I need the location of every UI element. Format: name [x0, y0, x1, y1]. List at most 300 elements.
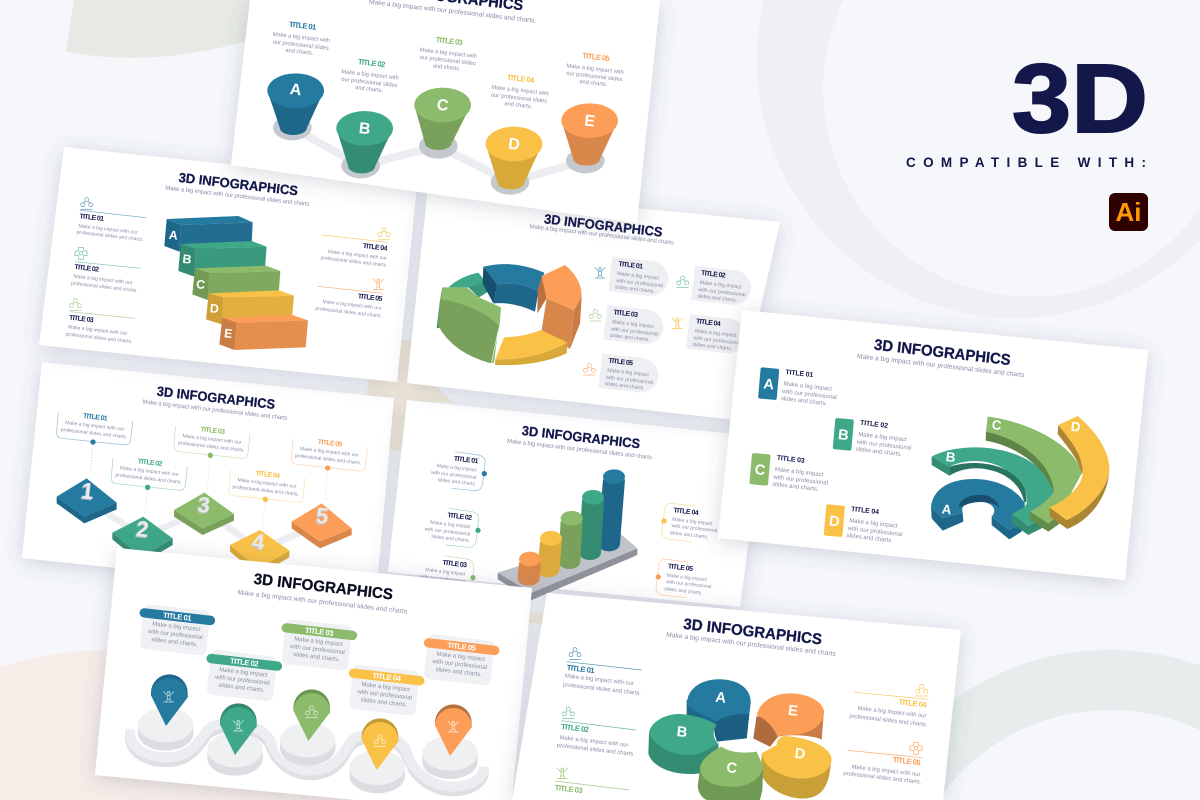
petal C [698, 747, 763, 800]
item 3: TITLE 03 [554, 783, 583, 795]
wavy base [130, 723, 484, 791]
card 4: TITLE 04 [372, 671, 402, 683]
item D: Make a big impact [849, 518, 898, 530]
item 3: our professional slides [419, 55, 476, 67]
cone E [561, 103, 618, 173]
item 5: TITLE 05 [357, 293, 383, 303]
subheading: Make a big impact with our professional slides and charts [142, 399, 288, 422]
item 5: slides and charts. [664, 586, 703, 597]
card 3 [603, 305, 665, 346]
pin 5 [435, 704, 472, 756]
item 2: Make a big impact with our [73, 274, 133, 286]
item 1: TITLE 01 [289, 20, 317, 32]
callout 3: TITLE 03 [200, 426, 225, 436]
item 5: Make a big impact with our [322, 299, 382, 312]
item 3: and charts. [432, 63, 461, 73]
card 1: with our professional [147, 629, 203, 641]
slide content [437, 211, 753, 394]
item 3: slides and charts. [426, 581, 465, 592]
pin 2 [220, 703, 257, 755]
item 4: Make a big impact [672, 517, 713, 527]
donut chart [437, 264, 582, 365]
segment: orange [537, 265, 582, 349]
callout 5: Make a big impact with our [300, 446, 359, 459]
card 5: TITLE 05 [608, 358, 633, 367]
card 3: slides and charts. [609, 333, 650, 343]
card 3 [281, 619, 358, 671]
connector path [292, 128, 585, 182]
platform 2 [112, 516, 173, 563]
item 3: Make a big impact [425, 567, 466, 578]
card 3: TITLE 03 [613, 309, 638, 319]
petal D [761, 736, 832, 799]
subheading: Make a big impact with our professional slides and charts [507, 439, 652, 461]
stair E [219, 315, 308, 350]
cone B: B [358, 120, 371, 138]
item A [758, 367, 837, 407]
card 2 [691, 266, 753, 307]
slide: cones [231, 0, 660, 223]
callout 1: TITLE 01 [83, 413, 108, 423]
platform 3 [174, 492, 234, 535]
slide panel [231, 0, 660, 223]
heading: 3D INFOGRAPHICS [253, 571, 394, 604]
arc C [986, 417, 1082, 532]
item 5: Make a big impact with [566, 63, 624, 76]
item D: with our professional [846, 526, 903, 538]
slide: arcs [718, 310, 1148, 580]
disc 3 [277, 723, 338, 766]
icon 3 [589, 309, 601, 321]
platform 4 [230, 529, 289, 575]
cone D: D [507, 136, 521, 154]
title: 3D: 3D [1012, 44, 1148, 153]
item 5 [315, 279, 384, 319]
heading: 3D INFOGRAPHICS [178, 170, 299, 198]
item A: TITLE 01 [785, 369, 814, 379]
pin 4 [362, 718, 398, 770]
callout 3: professional slides and charts [178, 440, 244, 454]
background: tan cross [366, 340, 550, 624]
pin 3 [293, 689, 330, 741]
callout 2: Make a big impact with our [120, 465, 179, 478]
bar A [598, 469, 625, 551]
stair D [206, 290, 294, 324]
item D: TITLE 04 [851, 506, 879, 516]
bar B [579, 490, 604, 560]
card 2: Make a big impact [700, 280, 742, 291]
callout 4: TITLE 04 [255, 470, 280, 480]
platform 5: 5 [315, 503, 330, 529]
heading: 3D INFOGRAPHICS [156, 384, 276, 412]
card 2: Make a big impact [219, 667, 268, 679]
background: top-left green shape [66, 0, 256, 58]
item 2: Make a big impact with our [559, 735, 629, 749]
item 1: professional slides and charts. [76, 230, 144, 243]
petal C: C [725, 760, 738, 777]
callout 2: professional slides and charts [115, 472, 181, 486]
card 3: Make a big impact [294, 637, 343, 648]
card 5: TITLE 05 [447, 641, 477, 653]
item 3: professional slides and charts. [65, 332, 133, 345]
item 2: TITLE 02 [447, 512, 472, 522]
card 4 [348, 664, 425, 716]
item 4: TITLE 04 [898, 697, 928, 710]
icon 2 [677, 276, 689, 288]
item 4 [849, 684, 929, 728]
card 4 [686, 314, 748, 355]
card 1: TITLE 01 [163, 611, 193, 623]
subheading: Make a big impact with our professional slides and charts [237, 589, 408, 616]
slide panel [39, 147, 417, 382]
item 4: Make a big impact with our [857, 706, 927, 720]
callout 4: Make a big impact with our [237, 477, 297, 490]
bar D [537, 531, 562, 577]
slide panel [95, 548, 532, 800]
heading: 3D INFOGRAPHICS [873, 337, 1012, 369]
cone C: C [436, 97, 450, 115]
stair C: C [195, 277, 206, 292]
item 3 [65, 299, 135, 345]
stair D: D [209, 301, 220, 316]
callout 3 [174, 426, 250, 490]
item 1 [272, 20, 330, 57]
slide: map pins [95, 548, 532, 800]
heading: 3D INFOGRAPHICS [682, 616, 823, 648]
callout 4: professional slides and charts. [232, 484, 299, 498]
disc 5 [419, 736, 481, 779]
card 4: Make a big impact [361, 682, 410, 693]
item 2 [71, 247, 141, 294]
background: bottom-right green ring [868, 650, 1200, 800]
item 4: Make a big impact with our [328, 249, 387, 262]
slide panel [718, 310, 1148, 580]
card 5: Make a big impact [607, 368, 650, 378]
item 3 [419, 35, 477, 73]
card 3: with our professional [289, 644, 345, 656]
slide: cylinder bars [388, 400, 762, 607]
item 5: TITLE 05 [582, 51, 611, 63]
item A: with our professional [781, 389, 837, 401]
card 2: slides and charts. [218, 683, 265, 694]
item 5: TITLE 05 [667, 563, 693, 573]
platform 1: 1 [80, 478, 95, 504]
item 1: TITLE 01 [566, 663, 596, 675]
item 4 [661, 503, 717, 542]
subheading: Make a big impact with our professional slides and charts [857, 353, 1025, 379]
item B: B [837, 427, 850, 444]
slide content [419, 423, 717, 600]
item 2: Make a big impact [430, 520, 471, 530]
card 4: slides and charts. [692, 342, 733, 352]
item 1: Make a big impact with our [78, 223, 138, 236]
icon: Adobe Illustrator: Ai [1116, 197, 1142, 227]
item 5 [843, 742, 923, 786]
item 2 [556, 707, 636, 758]
callout 1: professional slides and charts [60, 427, 127, 440]
slide panel [22, 362, 394, 595]
item 4: professional slides and charts. [849, 714, 928, 728]
stair C [192, 266, 280, 300]
item 2: professional slides and charts. [556, 743, 635, 758]
card 3: slides and charts. [293, 652, 340, 663]
item 4: Make a big impact with [491, 85, 549, 97]
slide panel [512, 593, 961, 800]
item 5: with our professional [666, 579, 712, 590]
subheading: Make a big impact with our professional slides and charts [529, 224, 674, 247]
item 2: TITLE 02 [358, 57, 386, 69]
item 5: TITLE 05 [892, 755, 922, 767]
bar E [518, 552, 541, 586]
heading: 3D INFOGRAPHICS [543, 211, 663, 240]
item 1: TITLE 01 [453, 456, 479, 465]
slide content [65, 170, 390, 350]
card 5 [423, 634, 500, 686]
item 3 [419, 556, 476, 595]
item B: Make a big impact [858, 432, 907, 443]
item 4: our professional slides [491, 92, 547, 105]
base plate [498, 533, 637, 600]
item 2: professional slides and charts. [71, 281, 138, 294]
cone D [486, 127, 542, 195]
item 5: Make a big impact [666, 573, 708, 583]
item 5 [566, 51, 624, 88]
petal B: B [676, 724, 688, 741]
heading: 3D INFOGRAPHICS [521, 423, 641, 451]
item A: Make a big impact [783, 381, 832, 393]
callout 1: Make a big impact with our [65, 420, 125, 433]
item 5: Make a big impact with our [851, 764, 921, 778]
item 2: and charts. [355, 85, 384, 94]
arc D [1049, 416, 1109, 529]
slide content [749, 337, 1109, 544]
item 1: and charts. [285, 48, 314, 57]
item 2 [424, 508, 481, 547]
icon 5 [583, 363, 595, 375]
connector path [87, 500, 322, 550]
petal E: E [787, 703, 799, 720]
disc 1 [135, 708, 196, 751]
callout 2: TITLE 02 [137, 458, 163, 468]
item 1: Make a big impact with [272, 32, 330, 44]
item D: slides and charts. [846, 533, 893, 544]
subheading: Make a big impact with our professional slides and charts [666, 632, 837, 658]
item 1 [563, 648, 642, 697]
item D: D [828, 513, 841, 531]
platform 2: 2 [135, 516, 150, 542]
item C: with our professional [772, 475, 828, 487]
callout 5: professional slides and charts. [294, 453, 362, 466]
petal A: A [714, 690, 727, 707]
stair E: E [223, 326, 233, 341]
item 2: slides and charts. [431, 534, 470, 544]
slide: petals [512, 593, 961, 800]
segment: green [438, 287, 501, 363]
item 1 [431, 452, 487, 491]
item 3 [554, 768, 629, 795]
callout 4 [229, 470, 305, 529]
arc B [932, 447, 1054, 535]
icon: Adobe Illustrator [1109, 193, 1148, 231]
card 2 [206, 649, 283, 702]
card 1: TITLE 01 [618, 261, 643, 271]
card 1: Make a big impact [617, 271, 660, 282]
slide panel [407, 188, 780, 420]
item 3: Make a big impact with our [68, 324, 128, 337]
item 3: with our professional [419, 574, 465, 585]
item 2: Make a big impact with [341, 69, 399, 82]
item 5: our professional slides [566, 71, 623, 83]
segment: yellow [495, 330, 567, 365]
item 1: TITLE 01 [79, 213, 104, 223]
item 5 [656, 559, 712, 598]
item B: slides and charts. [855, 447, 902, 458]
item 1 [76, 198, 146, 243]
background: top-right ring [757, 0, 1200, 318]
slide content [130, 571, 500, 793]
platform 3: 3 [197, 492, 211, 518]
card 5: slides and charts. [435, 667, 482, 678]
card 5 [598, 353, 660, 394]
callout 1 [57, 413, 133, 470]
petal B [648, 714, 718, 774]
item 5: professional slides and charts. [315, 306, 382, 319]
stair A [164, 216, 253, 252]
platform 1 [57, 478, 117, 523]
card 1 [608, 257, 670, 298]
card 5: Make a big impact [436, 652, 485, 663]
item B: with our professional [855, 440, 912, 452]
cone A: A [289, 81, 303, 99]
disc 2 [204, 733, 266, 776]
disc 4 [347, 750, 408, 793]
item 1: our professional slides [272, 39, 329, 52]
item 4: with our professional [671, 523, 717, 534]
callout 3: Make a big impact with our [182, 433, 242, 446]
slide content [554, 616, 929, 800]
item 3: TITLE 03 [69, 315, 94, 324]
platform 5 [292, 503, 352, 548]
callout 5 [291, 439, 367, 501]
callout 2 [111, 458, 187, 514]
card 3: with our professional [610, 326, 658, 338]
item 2: TITLE 02 [561, 722, 589, 734]
petal D: D [794, 746, 806, 763]
item 1: professional slides and charts. [563, 682, 642, 697]
slide panel [388, 400, 762, 607]
cone A [267, 73, 324, 140]
item 4: professional slides and charts. [320, 255, 388, 269]
stair B: B [182, 252, 192, 267]
cone B [336, 111, 393, 178]
petal E [753, 693, 824, 747]
item 4 [491, 73, 549, 110]
card 1: slides and charts. [614, 284, 655, 295]
card 2: slides and charts. [697, 293, 738, 304]
card 1: Make a big impact [152, 622, 201, 633]
stair B [178, 241, 267, 277]
item C: C [754, 462, 767, 479]
card 2: with our professional [698, 287, 746, 298]
platform 4: 4 [251, 529, 267, 555]
cone E: E [583, 112, 596, 131]
item 2 [341, 57, 399, 94]
card 3: TITLE 03 [305, 626, 334, 638]
stair A: A [168, 228, 179, 243]
card 4: slides and charts. [360, 697, 407, 709]
arc D: D [1070, 419, 1082, 435]
item C: TITLE 03 [776, 455, 805, 465]
slide: numbered platforms [22, 362, 394, 595]
item 5: professional slides and charts. [843, 771, 922, 786]
item 5: and charts. [579, 79, 608, 88]
item A: A [762, 376, 775, 394]
icon 1 [595, 267, 605, 278]
item A: slides and charts. [781, 396, 828, 407]
arc A: A [941, 501, 953, 518]
card 1: slides and charts. [151, 637, 198, 648]
cone C [414, 88, 471, 159]
item 4 [320, 228, 390, 269]
callout 5: TITLE 05 [317, 439, 343, 449]
card 4: Make a big impact [695, 328, 737, 339]
item 1: with our professional [431, 470, 477, 481]
card 5: with our professional [431, 659, 487, 671]
item 1: Make a big impact with our [565, 673, 634, 687]
background: bottom-left peach circle [0, 650, 402, 800]
item C [749, 453, 828, 493]
item 4: TITLE 04 [362, 243, 388, 253]
card 4: with our professional [356, 689, 412, 701]
card 4: TITLE 04 [696, 318, 721, 328]
item 3: TITLE 03 [435, 35, 463, 47]
item 2: TITLE 02 [74, 264, 99, 274]
card 1 [139, 604, 216, 656]
item 4: TITLE 04 [673, 507, 699, 517]
segment: blue [483, 264, 544, 312]
card 5: slides and charts. [604, 381, 645, 392]
item B: TITLE 02 [860, 420, 888, 430]
slide: staircase [39, 147, 417, 382]
item 1: Make a big impact [436, 463, 478, 474]
card 3: Make a big impact [612, 319, 655, 330]
subheading: Make a big impact with our professional slides and charts [165, 185, 310, 208]
icon 4 [672, 318, 683, 329]
item 4: slides and charts. [669, 530, 709, 541]
arc A [931, 479, 1025, 539]
item 4: and charts. [504, 101, 533, 110]
item 3: Make a big impact with [419, 47, 477, 60]
pin 1 [151, 674, 188, 726]
segment: teal [437, 273, 492, 328]
card 5: with our professional [605, 375, 653, 386]
card 2: with our professional [214, 675, 270, 687]
card 1: with our professional [615, 278, 663, 289]
item C: slides and charts. [772, 482, 819, 493]
slide content [267, 0, 624, 195]
item B [833, 418, 912, 458]
item 2: our professional slides [341, 77, 398, 89]
item 3: TITLE 03 [442, 560, 467, 569]
item 1: slides and charts. [437, 477, 477, 488]
slide content [57, 384, 367, 575]
item D [824, 504, 903, 544]
petal A [687, 679, 751, 742]
slide: donut [407, 188, 780, 420]
item 2: with our professional [424, 526, 470, 538]
arc B: B [945, 449, 957, 465]
card 2: TITLE 02 [230, 656, 259, 669]
